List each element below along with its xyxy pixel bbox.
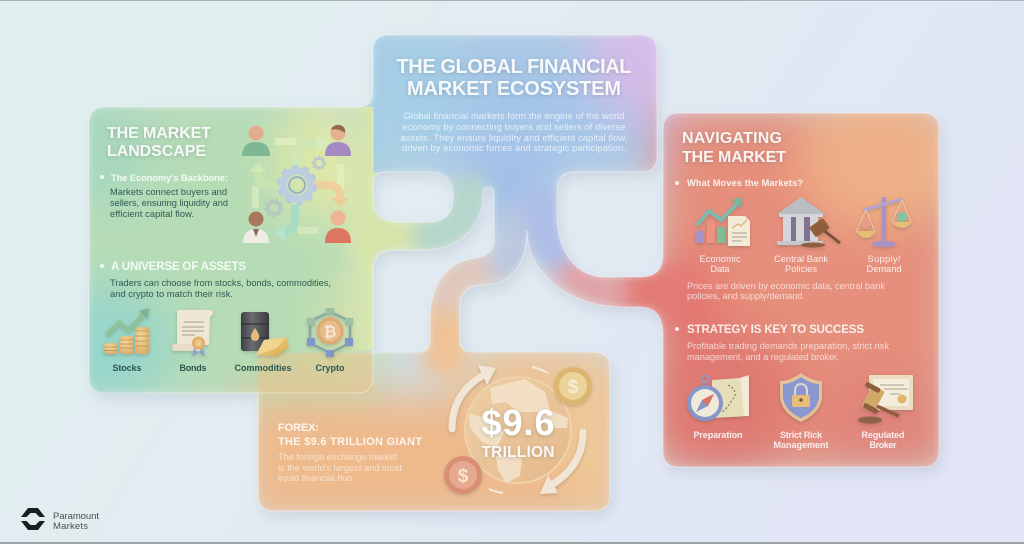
panel: forex [278,365,592,494]
bullet: economy's backbone: efficient capital flow. [110,209,194,219]
bullet: universe of assets: and crypto to match their risk. [110,289,233,299]
red colors [655,105,955,475]
crisp edge between center and green panels [373,36,404,172]
label: regulated broker [862,430,904,450]
heading: NAVIGATING [682,130,782,147]
label: economic data: Data [710,264,730,274]
icon: central bank [777,197,840,248]
gears [280,168,314,202]
bullet: what moves the markets: What Moves the Markets? [687,178,803,188]
bullet: economy's backbone: sellers, ensuring liquidity and [110,198,228,208]
intro text: driven by economic forces and strategic participation. [402,143,626,153]
bullet: economy's backbone: The Economy's Backbone: [111,173,228,183]
value [482,402,554,461]
icon: crypto: ₿ [323,323,337,341]
inner glow [89,35,939,511]
bullet: strategy: Profitable trading demands preparation, strict risk [687,341,889,351]
heading: THE $9.6 TRILLION GIANT [278,436,422,448]
arrow: circular bottom [540,432,583,494]
globe [465,377,571,483]
orange colors [240,395,630,525]
label: supply demand: Supply/ [868,254,901,264]
icon: stocks [104,308,149,354]
icon: logo mark [21,508,45,530]
panel: navigating the market [675,130,913,450]
forex text [278,452,402,483]
bullet: strategy [675,324,889,362]
forex text: liquid financial huo. [278,473,355,483]
label: central bank policies [774,254,828,274]
green colors [60,90,375,410]
intro text: Global financial markets form the engine of the world [404,111,624,121]
icon: network of people and gears [242,125,351,243]
label: central bank policies: Policies [785,264,817,274]
bullet: strategy: management, and a regulated broker. [687,352,839,362]
connector colors [375,195,670,355]
heading: LANDSCAPE [107,143,206,160]
panel shadow [92,41,942,517]
label: central bank policies: Central Bank [774,254,828,264]
logo: Paramount [53,511,99,522]
label: commodities: Commodities [234,363,292,373]
icon: shield with lock [780,373,822,422]
forex text: The foreign exchange market [278,452,397,462]
heading [682,130,786,166]
label: bonds: Bonds [180,363,206,373]
coin bottom [444,456,482,494]
forex text: is the world's largest and most [278,463,402,473]
icon: crypto [307,308,353,357]
text: price drivers [687,281,885,301]
intro text: economy by connecting buyers and sellers of diverse [402,122,626,132]
title: THE GLOBAL FINANCIAL [396,56,632,78]
orange showing through green corner [258,353,373,393]
heading [278,422,422,448]
coin top: $ [568,377,579,398]
icon: economic data [696,197,750,246]
icon: commodities [241,312,289,356]
logo [21,508,99,532]
label: supply demand: Demand [866,264,902,274]
bullet: universe of assets: Traders can choose from stocks, bonds, commodities, [110,278,331,288]
intro text: assets. They ensure liquidity and efficient capital flow, [400,133,628,143]
label: economic data [700,254,741,274]
connected glass panels [89,35,939,511]
heading: THE MARKET [682,149,786,166]
bullet: strategy: STRATEGY IS KEY TO SUCCESS [687,324,864,336]
intro text [400,111,628,153]
heading [107,125,211,160]
icon: preparation compass and map [687,375,749,421]
label: strict risk management: Management [774,440,828,450]
central colors [373,25,657,175]
label: supply demand [866,254,902,274]
value: $9.6 [482,402,554,443]
text: price drivers: policies, and supply/demand. [687,291,805,301]
panel: market landscape [100,125,353,373]
logo: Markets [53,521,88,532]
label: preparation: Preparation [694,430,742,440]
icon: globe with arrows and coins [444,365,592,494]
coin top [554,367,592,405]
bullet: economy's backbone: Markets connect buyers and [110,187,227,197]
people [248,126,264,140]
label: strict risk management [774,430,828,450]
arrow: circular top [452,365,496,429]
heading: THE MARKET [107,125,211,142]
bullet: universe of assets [100,261,331,299]
label: strict risk management: Strict Rick [780,430,823,440]
text: price drivers: Prices are driven by economic data, central bank [687,281,885,291]
icon: regulated broker certificate and gavel [858,375,913,424]
title [396,56,632,100]
label: regulated broker: Broker [870,440,897,450]
panel outline [89,35,939,511]
panel: central title [396,56,632,153]
label: stocks: Stocks [112,363,142,373]
coin bottom: $ [458,466,469,487]
icon: supply and demand scale [856,197,912,247]
heading: FOREX: [278,422,319,434]
bullet: economy's backbone [100,173,228,219]
icon: bonds [172,310,213,356]
label: regulated broker: Regulated [862,430,904,440]
value: TRILLION [482,444,554,461]
label: economic data: Economic [700,254,741,264]
label: crypto: Crypto [316,363,345,373]
title: MARKET ECOSYSTEM [407,78,621,100]
bullet: universe of assets: A UNIVERSE OF ASSETS [111,261,246,273]
